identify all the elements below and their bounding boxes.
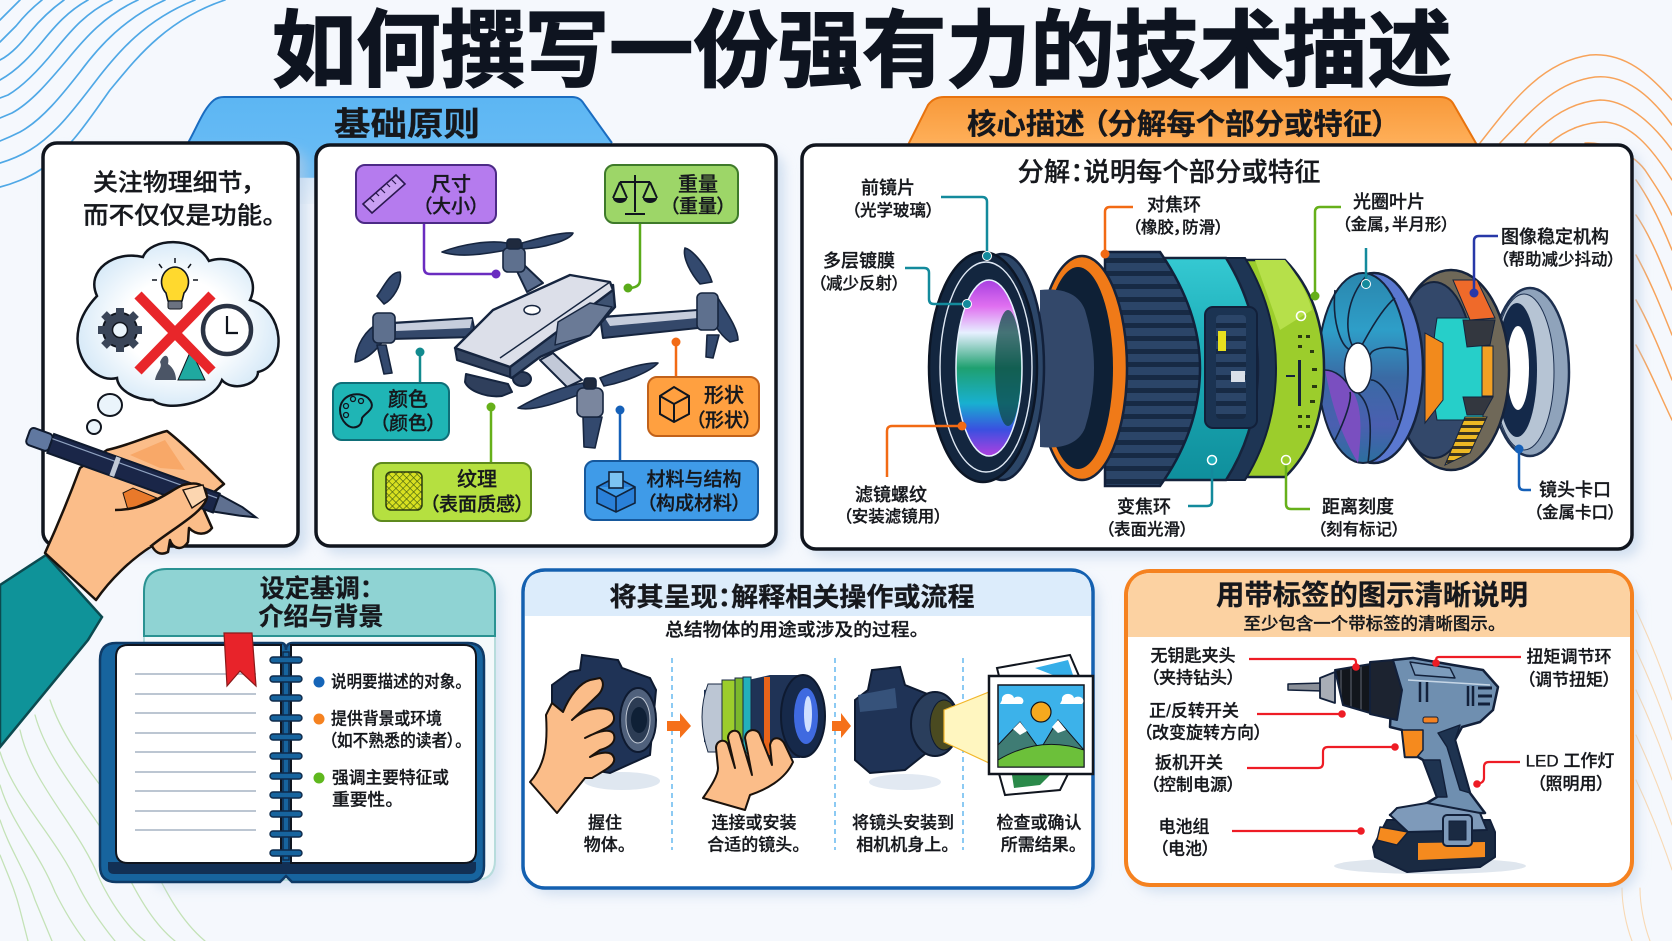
callout: battery: 电池组 bbox=[1158, 818, 1210, 836]
callout: direction switch: 正/反转开关 bbox=[1149, 702, 1239, 720]
zoom ring barrel bbox=[1161, 258, 1258, 480]
bullet list: （如不熟悉的读者）。 bbox=[329, 730, 463, 750]
label: weight bbox=[605, 165, 738, 292]
callout: multi coating: （减少反射） bbox=[818, 274, 900, 293]
callout: multi coating bbox=[818, 251, 972, 308]
step 1: hold camera bbox=[530, 655, 660, 854]
callout: focus ring: 对焦环 bbox=[1147, 195, 1201, 215]
step 4: check result: 所需结果。 bbox=[1001, 836, 1077, 854]
callout: battery bbox=[1158, 818, 1365, 858]
exploded lens illustration bbox=[929, 252, 1569, 486]
callout: trigger: （控制电源） bbox=[1150, 776, 1236, 794]
step 2: attach lens: 连接或安装 bbox=[712, 814, 796, 832]
title: 如何撰写一份强有力的技术描述 bbox=[272, 4, 1452, 98]
bullet list: 重要性。 bbox=[332, 790, 394, 810]
panel heading: 设定基调： bbox=[260, 575, 372, 603]
callout: stabiliser bbox=[1470, 227, 1616, 298]
drone camera bbox=[465, 374, 512, 396]
panel: lens diagram bbox=[802, 145, 1632, 549]
callout: multi coating: 多层镀膜 bbox=[823, 251, 895, 271]
callout: direction switch bbox=[1144, 702, 1346, 742]
callout: keyless chuck: （夹持钻头） bbox=[1150, 668, 1236, 688]
callout: torque ring bbox=[1432, 648, 1612, 690]
callout: distance scale: 距离刻度 bbox=[1322, 497, 1394, 517]
label: colour bbox=[333, 348, 449, 440]
section tab: 核心描述 bbox=[908, 97, 1477, 145]
drill bit and chuck bbox=[1288, 683, 1323, 691]
stabiliser assembly bbox=[1393, 270, 1509, 470]
label: size: 尺寸 bbox=[431, 173, 471, 196]
icon: red cross bbox=[138, 295, 212, 371]
focus ring bbox=[1105, 252, 1200, 486]
panel: labelled diagram bbox=[1126, 571, 1632, 885]
panel heading: 关注物理细节， bbox=[93, 170, 255, 196]
callout: front lens bbox=[852, 178, 992, 260]
callout: zoom ring: （表面光滑） bbox=[1106, 520, 1188, 539]
bullet list: 提供背景或环境 bbox=[331, 710, 442, 728]
callout: distance scale bbox=[1282, 456, 1400, 539]
section tab: 核心描述: 核心描述 （分解每个部分或特征） bbox=[967, 108, 1387, 141]
callout: distance scale: （刻有标记） bbox=[1318, 520, 1400, 539]
panel heading: 将其呈现：解释相关操作或流程 bbox=[610, 582, 974, 612]
callout: focus ring bbox=[1100, 195, 1223, 258]
panel heading: 用带标签的图示清晰说明 bbox=[1216, 580, 1528, 610]
step 2: attach lens bbox=[702, 675, 825, 854]
icon: ruler bbox=[363, 175, 405, 213]
drill battery bbox=[1373, 820, 1495, 872]
bookmark bbox=[224, 633, 256, 686]
panel heading: 介绍与背景 bbox=[258, 603, 384, 631]
label: weight: （重量） bbox=[669, 196, 727, 218]
callout: keyless chuck: 无钥匙夹头 bbox=[1150, 646, 1236, 666]
label: colour: （颜色） bbox=[379, 412, 437, 434]
label: material: （构成材料） bbox=[646, 492, 742, 514]
drone body bbox=[510, 285, 615, 378]
drill illustration bbox=[1288, 658, 1526, 874]
drone arms bbox=[390, 263, 698, 387]
label: texture: （表面质感） bbox=[429, 494, 525, 516]
spiral binding bbox=[270, 652, 302, 860]
front element bbox=[929, 252, 1044, 482]
callout: focus ring: （橡胶，防滑） bbox=[1133, 218, 1223, 237]
step 1: hold camera: 物体。 bbox=[584, 836, 626, 854]
dark band bbox=[1225, 258, 1276, 480]
aperture blades bbox=[1318, 273, 1423, 463]
callout: aperture blades bbox=[1310, 192, 1450, 300]
label: shape: 形状 bbox=[704, 384, 744, 407]
label: shape: （形状） bbox=[695, 410, 753, 432]
label: shape bbox=[648, 338, 759, 436]
callout: lens mount bbox=[1514, 444, 1616, 522]
callout: aperture blades: 光圈叶片 bbox=[1353, 192, 1425, 212]
step 3: mount lens: 相机机身上。 bbox=[856, 836, 950, 854]
panel: present the process bbox=[523, 570, 1093, 888]
label: texture: 纹理 bbox=[457, 468, 497, 491]
label: colour: 颜色 bbox=[388, 388, 428, 411]
step 2: attach lens: 合适的镜头。 bbox=[707, 836, 801, 854]
panel: setting the tone bbox=[100, 569, 495, 882]
callout: filter thread: （安装滤镜用） bbox=[844, 507, 942, 526]
panel: drone attributes bbox=[316, 145, 776, 546]
label: texture bbox=[373, 402, 531, 521]
pen bbox=[25, 426, 259, 527]
callout: torque ring: （调节扭矩） bbox=[1526, 670, 1612, 690]
callout: keyless chuck bbox=[1150, 646, 1360, 688]
drone motors bbox=[373, 239, 718, 417]
panel: hand writing bbox=[0, 426, 259, 747]
label: weight: 重量 bbox=[678, 173, 718, 196]
callout: direction switch: （改变旋转方向） bbox=[1144, 722, 1262, 742]
thought cloud bbox=[78, 242, 279, 434]
callout: front lens: 前镜片 bbox=[861, 178, 915, 198]
icon: gear bbox=[98, 308, 142, 352]
callout: torque ring: 扭矩调节环 bbox=[1526, 648, 1612, 666]
step 4: check result bbox=[944, 655, 1093, 854]
callout: trigger: 扳机开关 bbox=[1155, 754, 1223, 772]
bullet list: 说明要描述的对象。 bbox=[331, 672, 463, 692]
panel subheading: 至少包含一个带标签的清晰图示。 bbox=[1244, 614, 1496, 634]
section tab: 基础原则 bbox=[188, 97, 612, 204]
callout: lens mount: （金属卡口） bbox=[1534, 502, 1616, 522]
lens mount bbox=[1491, 288, 1569, 456]
panel heading bbox=[83, 170, 275, 230]
icon: clock bbox=[203, 306, 251, 354]
step 1: hold camera: 握住 bbox=[588, 814, 622, 832]
drone propellers bbox=[355, 233, 738, 448]
callout: LED light: LED 工作灯 bbox=[1526, 752, 1614, 770]
step 3: mount lens: 将镜头安装到 bbox=[852, 814, 954, 832]
step 3: mount lens bbox=[852, 667, 959, 854]
callout: aperture blades: （金属，半月形） bbox=[1342, 214, 1450, 234]
label: size: （大小） bbox=[422, 196, 480, 218]
bullet list bbox=[314, 672, 463, 810]
panel heading: 而不仅仅是功能。 bbox=[83, 202, 275, 230]
icon: chess and mountain bbox=[155, 350, 205, 380]
callout: stabiliser: （帮助减少抖动） bbox=[1500, 250, 1616, 269]
drill handle and housing bbox=[1390, 658, 1498, 815]
sleeve bbox=[0, 555, 102, 747]
arrow bbox=[832, 713, 851, 738]
callout: filter thread: 滤镜螺纹 bbox=[855, 485, 927, 505]
notebook bbox=[100, 633, 484, 882]
callout: zoom ring: 变焦环 bbox=[1117, 496, 1171, 517]
icon: palette bbox=[340, 394, 372, 427]
callout: battery: （电池） bbox=[1160, 840, 1210, 858]
orange ring bbox=[1037, 256, 1127, 480]
label: material bbox=[585, 406, 758, 520]
step 4: check result: 检查或确认 bbox=[996, 814, 1082, 832]
distance scale barrel bbox=[1240, 260, 1324, 477]
callout: stabiliser: 图像稳定机构 bbox=[1501, 227, 1609, 247]
callout: LED light bbox=[1473, 752, 1614, 794]
callout: front lens: （光学玻璃） bbox=[852, 200, 934, 220]
label: material: 材料与结构 bbox=[646, 468, 742, 490]
panel heading: 分解：说明每个部分或特征 bbox=[1018, 157, 1320, 187]
arrow bbox=[667, 713, 691, 738]
icon: light bulb bbox=[152, 258, 198, 309]
callout: filter thread bbox=[844, 422, 966, 526]
callout: trigger bbox=[1150, 743, 1399, 794]
hand and pen bbox=[25, 426, 259, 600]
callout: zoom ring bbox=[1106, 456, 1216, 539]
callout: LED light: （照明用） bbox=[1537, 774, 1605, 794]
section tab: 基础原则: 基础原则 bbox=[334, 106, 480, 142]
thumb bbox=[112, 483, 207, 547]
panel subheading: 总结物体的用途或涉及的过程。 bbox=[665, 620, 919, 640]
panel: physical details bbox=[43, 143, 298, 546]
bullet list: 强调主要特征或 bbox=[332, 768, 449, 788]
panel heading bbox=[258, 575, 384, 631]
label: size bbox=[356, 165, 500, 278]
drone illustration bbox=[355, 233, 738, 448]
callout: lens mount: 镜头卡口 bbox=[1539, 480, 1611, 500]
